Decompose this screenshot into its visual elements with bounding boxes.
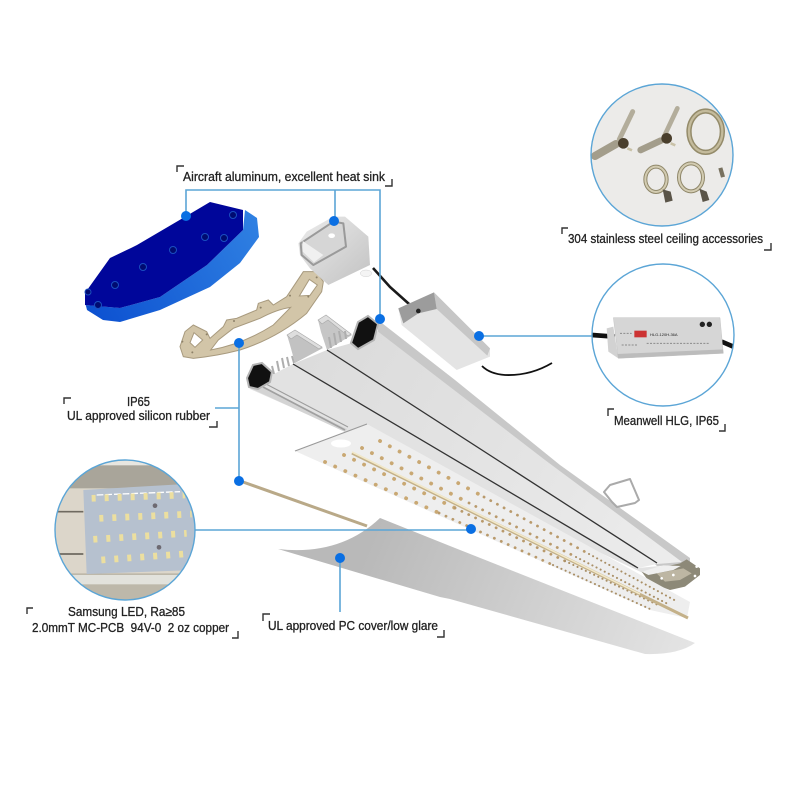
end cap far end [642, 559, 700, 590]
label: Samsung LED: Samsung LED, Ra≥85 [68, 604, 185, 619]
label: ceiling accessories: 304 stainless steel ceiling accessories [568, 231, 763, 246]
inset: Samsung LED board [53, 460, 197, 603]
LED PCB board [295, 424, 690, 618]
housing black lines [293, 350, 657, 568]
driver model label: HLG-120H-36A [650, 332, 678, 337]
label: silicon rubber: UL approved silicon rubber [67, 408, 211, 423]
inset: Meanwell driver [592, 264, 735, 406]
housing upper section [327, 330, 682, 564]
label: silicon rubber: IP65 [127, 394, 150, 409]
PCB plate [295, 424, 690, 618]
cover: PC cover / low glare [278, 518, 695, 654]
heat sink fins [272, 331, 346, 374]
housing outer band [378, 320, 690, 566]
mounting clip on housing [604, 479, 639, 507]
leader lines [186, 190, 592, 612]
label: PC cover [263, 614, 444, 637]
housing underside band [250, 387, 347, 432]
inset: ceiling accessories [591, 84, 733, 226]
housing middle section [293, 350, 657, 568]
extruded rail left [287, 330, 323, 363]
label: PC cover: UL approved PC cover/low glare [268, 618, 438, 633]
label: silicon rubber [64, 394, 217, 427]
label: Samsung LED [27, 604, 238, 638]
label: ceiling accessories [562, 228, 771, 250]
heat sink end cap in blue [85, 202, 259, 322]
black power cable [373, 268, 418, 312]
accessory hardware [595, 108, 725, 203]
left channel opening [247, 363, 272, 389]
LED rows near [325, 441, 484, 513]
label: Meanwell [608, 409, 725, 431]
heat sink screw holes [85, 212, 236, 308]
label: Meanwell: Meanwell HLG, IP65 [614, 413, 719, 428]
LED light strip [352, 453, 688, 618]
aluminum housing body [247, 315, 690, 574]
blue marker dots [181, 211, 484, 563]
rod: LED strip edge view [243, 482, 367, 526]
label: aircraft aluminum: Aircraft aluminum, excellent heat sink [183, 169, 385, 184]
LED rows far [553, 554, 678, 609]
housing lower section [250, 364, 660, 574]
rail groove [263, 387, 345, 430]
LED rows middle [439, 497, 589, 565]
right channel opening [351, 316, 378, 349]
driver unit [592, 318, 735, 358]
ceiling mount box [298, 217, 372, 285]
gasket: silicon rubber seal [180, 272, 323, 358]
driver output cable [482, 363, 552, 375]
heat sink side wall [85, 210, 259, 322]
driver housing [398, 292, 490, 370]
label: Samsung LED: 2.0mmT MC-PCB 94V-0 2 oz copper [32, 620, 230, 635]
heat sink top face [85, 202, 243, 308]
PCB mounting hole [331, 440, 351, 448]
LED board close-up [53, 460, 197, 603]
extruded rail right [318, 315, 352, 350]
